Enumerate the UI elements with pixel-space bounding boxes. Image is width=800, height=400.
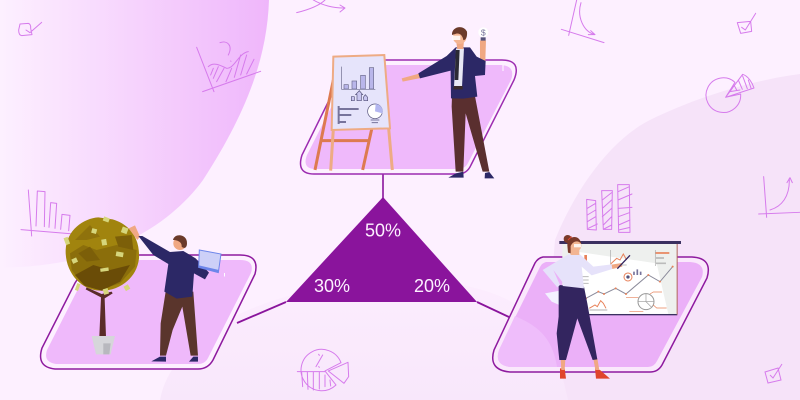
man holding laptop <box>129 225 221 362</box>
screen line chart <box>586 267 673 298</box>
screen small charts <box>611 250 627 265</box>
man presenting with dollar card: $ <box>481 27 486 37</box>
panel outline <box>41 255 256 369</box>
panel fill <box>498 262 703 367</box>
panel: top presenter <box>300 27 516 178</box>
crown <box>66 217 139 291</box>
money tree <box>64 216 139 354</box>
doodle: top centre arrow <box>297 0 345 13</box>
label: 50%: 50% <box>365 220 401 240</box>
doodle: bottom pie chart <box>297 349 349 391</box>
panel fill <box>306 65 512 169</box>
panel: right projector <box>493 235 708 379</box>
triangle <box>286 197 477 302</box>
doodle: left bar chart <box>21 190 78 236</box>
panel outline <box>300 60 516 174</box>
doodle: top right checkbox <box>737 13 756 33</box>
bar chart on board <box>342 67 375 89</box>
projector screen <box>559 241 681 315</box>
doodle: bottom right checkbox <box>765 364 782 383</box>
arrows on board <box>351 91 368 101</box>
background blob: top left <box>0 0 269 268</box>
pot <box>92 336 115 354</box>
panel outline <box>493 257 708 372</box>
pyramid with percentages <box>286 197 477 302</box>
screen pie <box>638 294 654 310</box>
doodle: pie chart right <box>706 74 754 113</box>
white highlight mark <box>224 273 225 276</box>
connector: top <box>382 173 384 198</box>
money bills <box>64 216 130 295</box>
doodle: top right curve chart <box>561 0 604 43</box>
label: 30%: 30% <box>314 276 350 296</box>
white highlight mark <box>502 65 504 71</box>
horizontal bars on board <box>339 106 359 124</box>
connector: right <box>477 302 509 317</box>
doodle: question chart <box>197 42 261 92</box>
trunk and branches <box>86 287 113 337</box>
panel fill <box>46 260 252 364</box>
doodle: hatched bars <box>587 185 632 232</box>
pie on board <box>368 104 382 119</box>
lighter panel shading <box>498 316 557 367</box>
doodle: right growth chart <box>759 177 800 217</box>
flip chart easel <box>315 55 392 171</box>
background blob: right <box>550 74 800 400</box>
man presenting with dollar card <box>402 27 494 178</box>
panel: left tree <box>41 216 256 369</box>
woman presenting <box>543 235 630 379</box>
background blob: bottom <box>160 280 568 400</box>
doodle: checkbox top left <box>19 22 42 36</box>
connector: left <box>237 302 286 323</box>
label: 20%: 20% <box>414 276 450 296</box>
